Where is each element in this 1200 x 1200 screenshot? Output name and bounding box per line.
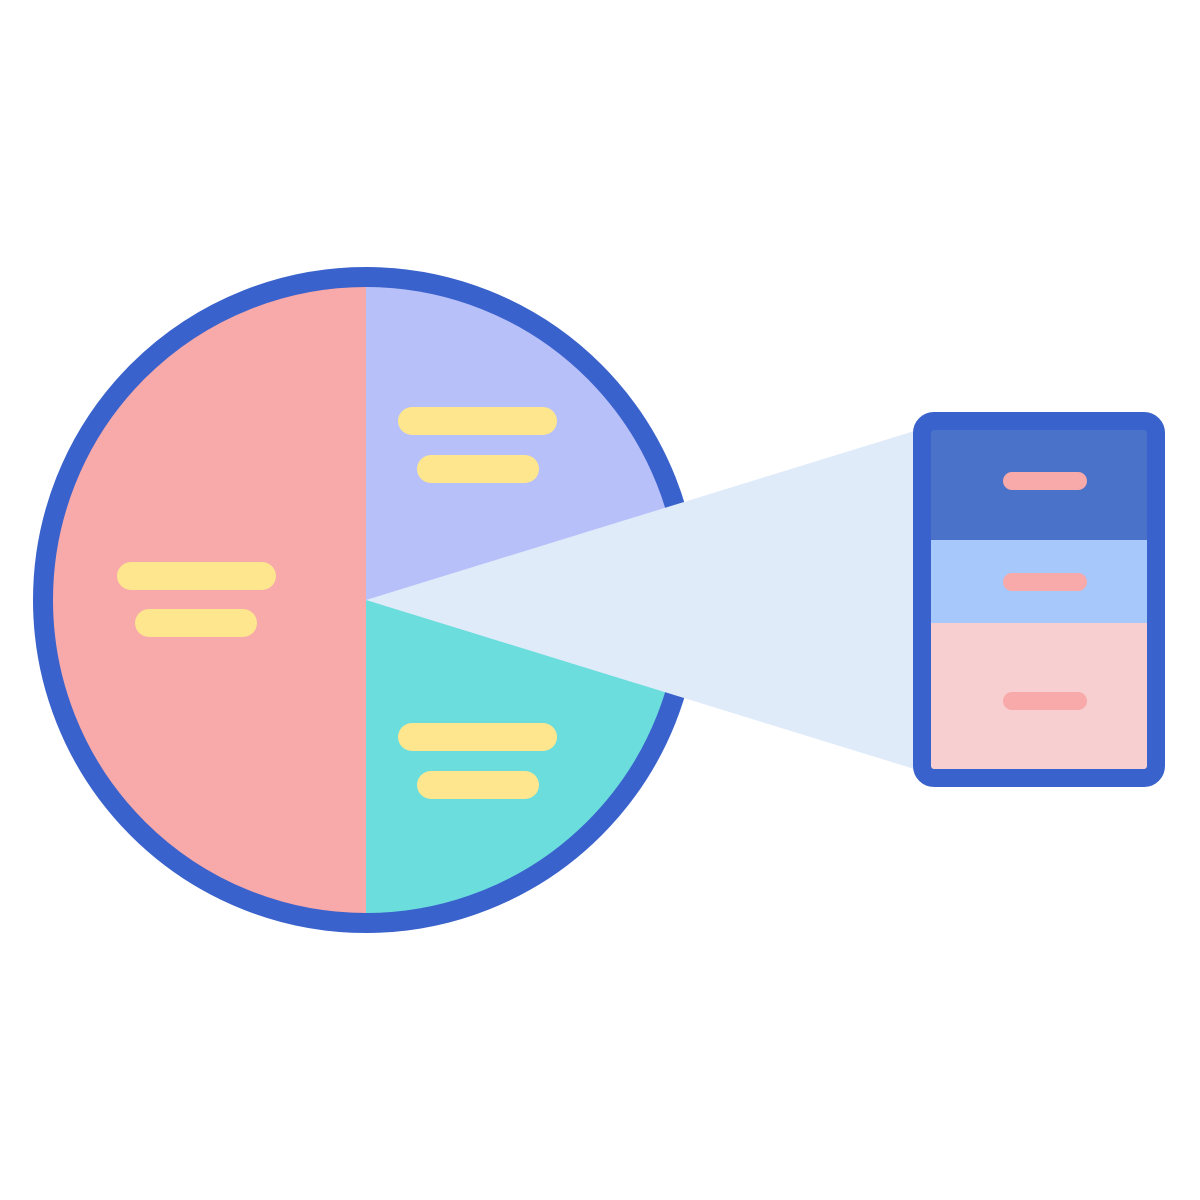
- pie chart: [43, 277, 689, 923]
- callout wedge: [366, 428, 924, 772]
- detail panel: [922, 421, 1156, 778]
- panel outline: [922, 421, 1156, 778]
- pink bars: [1012, 481, 1078, 701]
- section middle: [922, 540, 1156, 623]
- section bottom: [922, 623, 1156, 778]
- label bars left: [131, 576, 262, 623]
- slice: left half: [43, 277, 366, 923]
- slice: bottom right: [366, 600, 689, 923]
- slice: top right: [366, 277, 689, 600]
- label bars bottom right: [412, 737, 543, 785]
- label bars top right: [412, 421, 543, 469]
- pie outline: [43, 277, 689, 923]
- section top: [922, 421, 1156, 540]
